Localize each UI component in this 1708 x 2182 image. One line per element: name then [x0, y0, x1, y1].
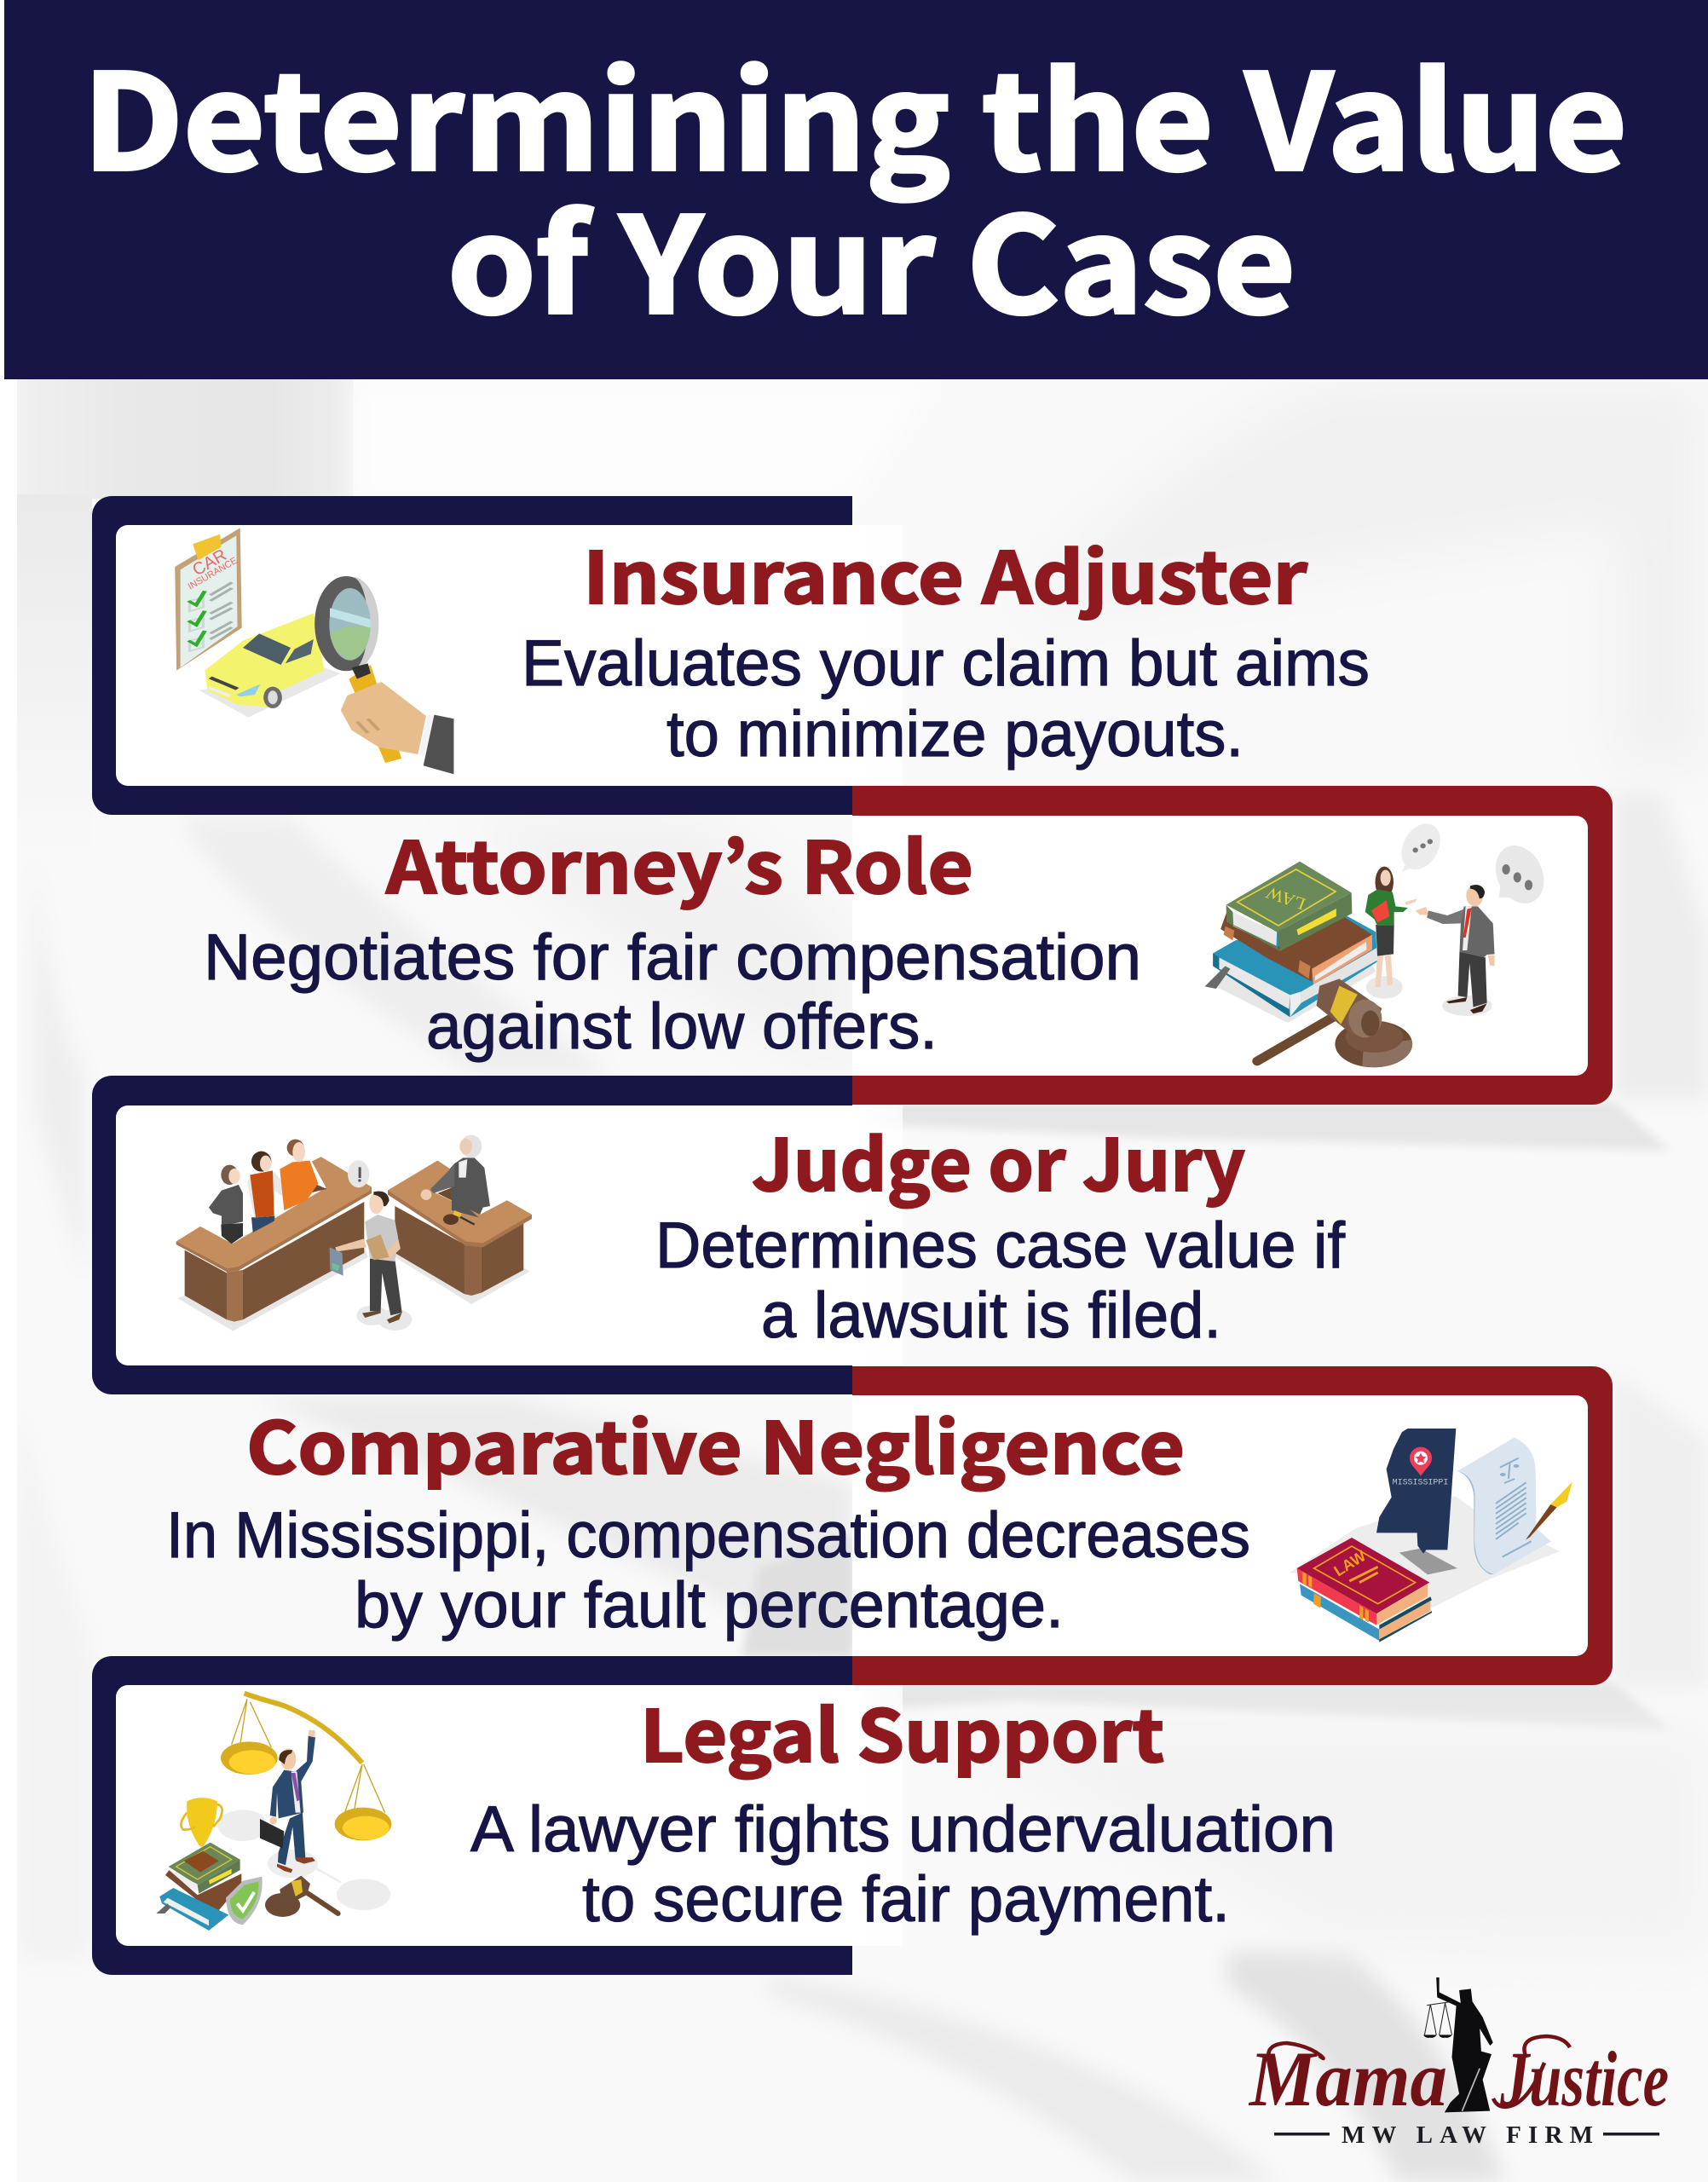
heading: Legal Support: [640, 1680, 1164, 1783]
body text: Determines case value if: [655, 1209, 1346, 1282]
logo: Mama Justice MW Law Firm: MW LAW FIRM: [1342, 2121, 1593, 2149]
body text: [655, 1209, 1346, 1352]
body text: Negotiates for fair compensation: [204, 921, 1141, 994]
icon: car insurance magnifier: [175, 528, 453, 774]
panel: judge or jury: [92, 1076, 1346, 1394]
body text: against low offers.: [426, 990, 938, 1063]
body text: [522, 627, 1370, 771]
icon: Mississippi map, law books, document: LAW: [1331, 1547, 1369, 1579]
heading: Judge or Jury: [752, 1109, 1245, 1212]
title text: Determining the Value: [83, 16, 1627, 208]
icon: car insurance magnifier: INSURANCE: [187, 556, 239, 592]
panel: insurance adjuster: [92, 496, 1370, 815]
logo: Mama Justice MW Law Firm: [1248, 1977, 1669, 2149]
body text: [166, 1499, 1250, 1642]
icon: law books, lawyers and gavel: LAW: [1264, 883, 1308, 913]
icon: scales, lawyer, trophy, gavel: [156, 1694, 391, 1931]
logo: Mama Justice MW Law Firm: Mama: [1248, 2035, 1447, 2122]
body text: a lawsuit is filed.: [761, 1279, 1221, 1352]
icon: car insurance magnifier: CAR: [189, 546, 230, 580]
heading: Comparative Negligence: [246, 1392, 1185, 1495]
body text: [470, 1793, 1336, 1936]
heading: Insurance Adjuster: [583, 522, 1307, 625]
panel: attorney's role: [204, 786, 1613, 1105]
icon: law books, lawyers and gavel: [1205, 817, 1552, 1067]
title banner: [4, 0, 1708, 379]
title text second line: of Your Case: [447, 159, 1295, 351]
body text: A lawyer fights undervaluation: [470, 1793, 1336, 1866]
body text: In Mississippi, compensation decreases: [166, 1499, 1250, 1572]
body text: [204, 921, 1141, 1063]
panel: comparative negligence: [166, 1366, 1613, 1685]
icon: Mississippi map, law books, document: [1290, 1429, 1572, 1642]
body text: by your fault percentage.: [355, 1569, 1064, 1642]
body text: to minimize payouts.: [666, 698, 1243, 771]
body text: to secure fair payment.: [582, 1863, 1230, 1936]
icon: courtroom: [176, 1135, 532, 1331]
panel: legal support: [92, 1656, 1336, 1975]
icon: lady justice statue: [1423, 1977, 1493, 2112]
heading: Attorney’s Role: [385, 811, 973, 915]
icon: Mississippi map, law books, document: MISSISSIPPI: [1393, 1477, 1448, 1486]
body text: Evaluates your claim but aims: [522, 627, 1370, 700]
